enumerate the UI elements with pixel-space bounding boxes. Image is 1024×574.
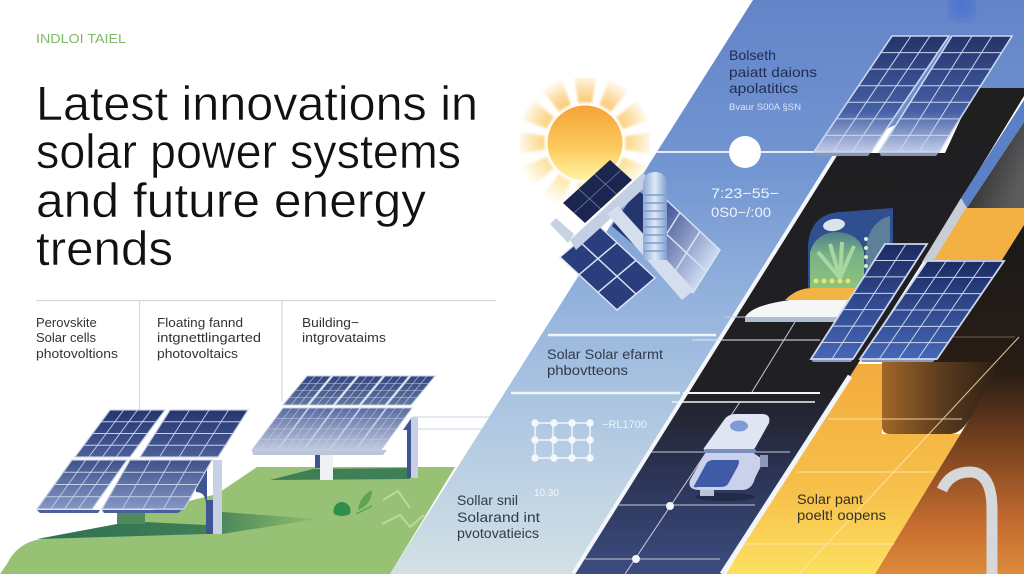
- title: trends: [36, 223, 173, 276]
- text: Building: Building−: [302, 315, 359, 330]
- ground shadow back: [270, 468, 410, 480]
- front array edge: [37, 510, 100, 513]
- decorative diamonds: [382, 491, 424, 527]
- text: applications: apolatitics: [729, 80, 798, 96]
- ground shadow front: [37, 512, 317, 539]
- icon: node grid: [532, 420, 593, 461]
- text: solar and integrated: Sollar snil: [457, 493, 518, 508]
- back array edge: [252, 450, 387, 455]
- text: Perovskite: Solar cells: [36, 330, 96, 345]
- long beam: [607, 206, 694, 300]
- cross beam: [570, 173, 652, 250]
- right light panel: [633, 194, 720, 293]
- brown inset: [882, 362, 1000, 434]
- left navy panel: [560, 225, 655, 310]
- yellow band grid lines: [746, 337, 1019, 574]
- text: figures: 7:23−55−: [711, 185, 779, 201]
- icon: robot device: [689, 414, 769, 501]
- text: solar plant: Solar pant: [797, 492, 863, 507]
- text: solar farm: phbovtteons: [547, 363, 628, 378]
- black band tile lines: [585, 317, 840, 574]
- text: Perovskite: [36, 315, 119, 361]
- text: solar and integrated: Solarand int: [457, 510, 540, 525]
- front array supports: [117, 460, 222, 534]
- text: solar farm: [547, 347, 663, 378]
- text: Building: intgrovataims: [302, 330, 387, 345]
- strip: grey separator: [922, 198, 968, 262]
- panel upper left: [75, 410, 165, 457]
- panel: middle right solar panels: [811, 244, 1004, 362]
- text: solar plant: [797, 492, 886, 523]
- middle panel right: [860, 261, 1004, 359]
- text: solar and integrated: [457, 493, 540, 541]
- text: Floating: photovoltaics: [157, 346, 239, 361]
- text: figures: [711, 185, 779, 220]
- horizontal band dividers: [511, 335, 716, 393]
- title: Latest innovations in: [36, 78, 478, 131]
- yellow tile: [934, 208, 1024, 260]
- text: figures: 0S0−/:00: [711, 204, 771, 220]
- icon: glass device: [808, 208, 893, 288]
- text: Floating: [157, 315, 261, 361]
- panel: dark right background: [875, 205, 1024, 574]
- small dark panel: [563, 160, 632, 223]
- text: Floating: Floating fannd: [157, 315, 243, 330]
- text: solar and integrated: pvotovatieics: [457, 526, 539, 541]
- text: grid value: −RL1700: [602, 419, 647, 431]
- text: Floating: intgnettlingarted: [157, 330, 261, 345]
- title: solar power systems: [36, 126, 461, 179]
- title: [36, 78, 478, 276]
- upper panel left: [814, 36, 949, 152]
- column divider lines: [36, 300, 496, 412]
- cylinder: [643, 172, 667, 260]
- text: time value: 10.30: [534, 488, 559, 499]
- band right edge: [722, 376, 850, 574]
- text: applications: [729, 47, 817, 113]
- panel: blue diagonal band: [390, 0, 1024, 574]
- connector: [550, 218, 574, 243]
- band white edge: [573, 152, 837, 574]
- panel: upper right solar panels: [814, 36, 1012, 156]
- dark corner tile: [967, 122, 1024, 208]
- text: Perovskite: Perovskite: [36, 315, 97, 330]
- text: Perovskite: photovoltions: [36, 346, 119, 361]
- text: Building: [302, 315, 387, 345]
- back solar array: [252, 376, 500, 480]
- text: applications: paiatt daions: [729, 64, 817, 80]
- panel: yellow band: [726, 364, 969, 574]
- top row modules: [283, 376, 435, 405]
- pipe: [942, 472, 992, 574]
- icon: sun: [531, 89, 639, 197]
- middle panel left: [811, 244, 927, 359]
- green ground: [0, 467, 455, 574]
- front solar array: [37, 410, 248, 534]
- device base: [745, 288, 862, 322]
- panel upper right: [140, 410, 248, 457]
- panel: ground with solar arrays: [0, 467, 455, 574]
- bottom row modules: [252, 408, 412, 450]
- dark inner panel: [612, 190, 662, 250]
- back array supports: [315, 417, 500, 480]
- text: solar plant: poelt! oopens: [797, 508, 886, 523]
- connector with node: [657, 136, 815, 168]
- title: and future energy: [36, 175, 426, 228]
- upper panel right: [879, 36, 1012, 152]
- panel: black diagonal band: [572, 88, 1024, 574]
- text: applications: Bolseth: [729, 47, 776, 63]
- panel lower left: [37, 460, 127, 509]
- panel lower right: [102, 460, 212, 509]
- text: applications: Bvaur S00A §SN: [729, 102, 801, 113]
- strip: blue sliver: [961, 100, 1024, 208]
- tag line: INDLOI TAIEL: [36, 31, 126, 46]
- text: solar farm: Solar Solar efarmt: [547, 347, 663, 362]
- icon: plant: [334, 490, 372, 516]
- white tile nodes: [632, 502, 674, 563]
- icon: floating solar module: [550, 160, 720, 310]
- top right glow: [950, 0, 974, 20]
